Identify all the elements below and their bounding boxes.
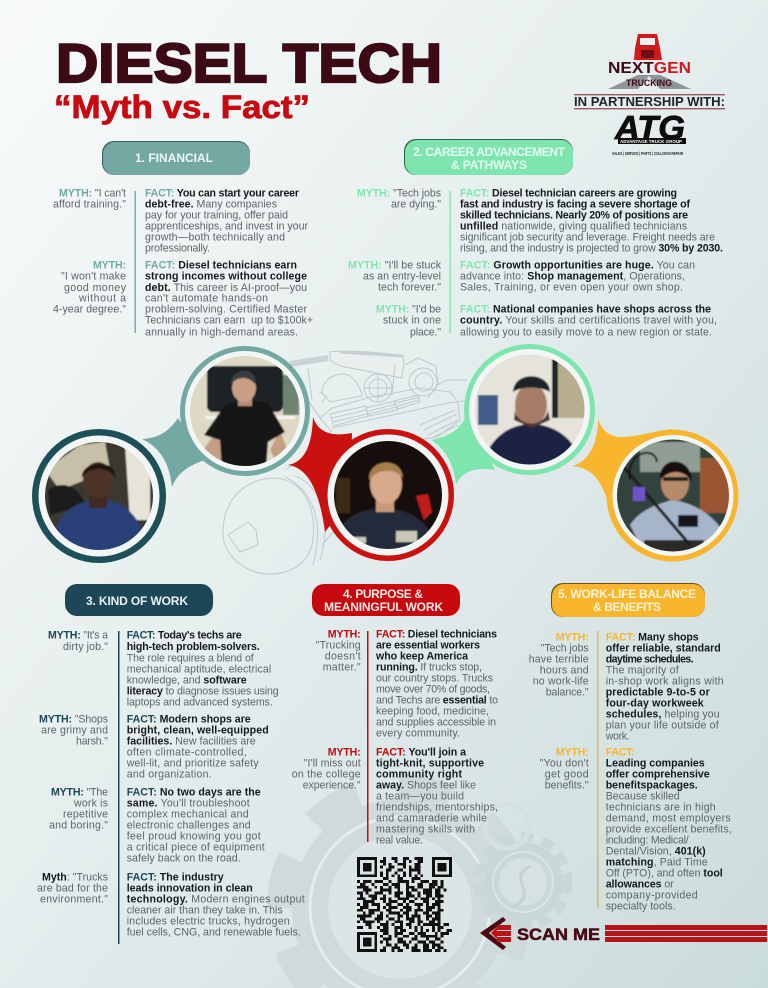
facts: FACT: Growth opportunities are huge. You can [460,260,695,272]
logo: Trucking wordmark: TRUCKING [626,78,672,88]
connector: amber [572,419,672,515]
facts [460,188,723,338]
heading: career advancement: & PATHWAYS [451,158,527,172]
myths: are grimy and [41,724,108,736]
facts: every community. [376,728,460,740]
facts: cleaner air than they take in. This [127,904,283,916]
panel: financial [53,141,313,338]
facts: Off (PTO), and often tool [606,868,723,880]
facts: Dental/Vision, 401(k) [606,846,706,858]
myths: no work-life [533,676,589,688]
facts: offer comprehensive [606,768,710,780]
facts: leads innovation in clean [127,882,253,894]
connector: red [288,417,352,532]
myths: "I won't make [61,270,126,282]
myths: MYTH: [556,746,589,758]
facts: feel proud knowing you got [127,830,261,842]
myths: hours and [540,664,589,676]
facts: can't automate hands-on [145,292,268,304]
facts: tight-knit, supportive [376,758,484,770]
logos: NextGen Trucking and ATG partnership [574,34,725,156]
facts: annually in high-demand areas. [145,326,298,338]
facts: apprenticeships, and invest in your [145,220,308,232]
facts: benefitspackages. [606,780,698,792]
facts: Technicians can earn up to $100k+ [145,314,313,326]
facts: technology. Modern engines output [127,894,305,906]
icon: red truck [634,34,662,60]
facts: daytime schedules. [606,654,694,666]
facts: predictable 9-to-5 or [606,686,710,698]
facts: mechanical aptitude, electrical [127,664,271,676]
myths: MYTH: "Tech jobs [357,188,441,200]
myths [529,632,589,792]
facts: knowledge, and software [127,674,247,686]
panel: career advancement [348,139,723,338]
myths: Myth: "Trucks [42,872,108,884]
myths: without a [78,292,126,304]
facts: keeping food, medicine, [376,706,489,718]
title: DIESEL TECH [56,32,442,94]
facts: complex mechanical and [127,808,249,820]
facts: often climate-controlled, [127,746,247,758]
myths: environment." [40,894,108,906]
photo: bearded technician [464,344,595,475]
facts: FACT: [606,746,635,758]
facts: Leading companies [606,758,705,770]
divider [134,191,136,333]
facts: bright, clean, well-equipped [127,724,269,736]
myths: matter." [323,662,361,674]
myths: MYTH: [328,746,361,758]
engine line sketch [223,351,480,574]
QR code [357,858,452,951]
myths: benefits." [545,780,589,792]
facts [145,188,313,338]
facts: away. Shops feel like [376,780,476,792]
facts: and camaraderie while [376,812,487,824]
facts: four-day workweek [606,698,704,710]
facts: problem-solving. Certified Master [145,304,307,316]
facts: provide excellent benefits, [606,824,732,836]
myths: MYTH: "I'd be [376,304,441,316]
myths: repetitive [63,808,108,820]
facts: in-shop work aligns with [606,676,724,688]
myths: MYTH: "I can't [59,188,126,200]
header: title block [54,32,442,125]
myths [348,188,442,338]
facts: FACT: Today's techs are [127,630,242,642]
facts: safely back on the road. [127,852,241,864]
facts: allowances or [606,878,674,890]
facts: fast and industry is facing a severe shortage of [460,198,690,210]
myths: "Trucking [316,640,361,652]
logo: ATG: SALES | SERVICE | PARTS | COLLISION REPAIR [612,151,683,156]
heading: purpose: MEANINGFUL WORK [324,600,443,614]
logo: NextGen wordmark: NEXTGEN [608,60,691,77]
heading: purpose [312,584,460,616]
facts: FACT: Diesel technicians [376,628,497,640]
heading: kind of work: 3. KIND OF WORK [86,594,188,608]
facts: and organization. [127,768,212,780]
myths: harsh." [76,736,108,748]
facts: including: Medical/ [606,834,689,846]
facts: significant job security and leverage. Freight needs are [460,232,715,244]
myths: are bad for the [37,882,108,894]
facts: real value. [376,834,423,846]
label: SCAN ME [517,926,600,944]
facts: FACT: You'll join a [376,746,466,758]
myths: experience." [303,780,361,792]
facts: a critical piece of equipment [127,842,265,854]
facts: same. You'll troubleshoot [127,798,250,810]
facts: rising, and the industry is projected to grow 30% by 2030. [460,242,723,254]
heading: work-life balance: & BENEFITS [593,600,661,614]
facts: FACT: National companies have shops across the [460,304,711,316]
facts: demand, most employers [606,812,731,824]
facts [605,632,732,912]
myths: as an entry-level [363,270,441,282]
facts: debt. This career is AI-proof—you [145,282,307,294]
facts: Because skilled [606,790,680,802]
myths: MYTH: "I'll be stuck [348,260,442,272]
myths: "I'll miss out [304,758,361,770]
connector: green [431,410,495,485]
facts: company-provided [606,890,698,902]
facts: move over 70% of goods, [376,684,490,696]
facts: growth—both technically and [145,232,285,244]
myths: MYTH: [328,628,361,640]
myths: 4-year degree." [53,304,126,316]
facts: well-lit, and prioritize safety [126,758,259,770]
facts: schedules, helping you [606,708,720,720]
myths: are dying." [391,198,441,210]
partnership label: IN PARTNERSHIP WITH: [574,95,725,109]
background gears [280,787,568,988]
heading: financial: 1. FINANCIAL [135,151,213,165]
facts: high-tech problem-solvers. [127,641,260,653]
divider [367,631,368,842]
heading: kind of work [65,584,213,616]
facts: FACT: You can start your career [145,188,299,200]
heading: work-life balance [551,583,705,617]
myths: MYTH: [556,632,589,644]
facts: advance into: Shop management, Operations, [460,270,685,282]
myths: afford training." [53,198,126,210]
myths: work is [73,798,108,810]
facts: country. Your skills and certifications travel with you, [460,314,717,326]
facts: skilled technicians. Nearly 20% of positions are [460,210,688,222]
panel: kind of work [37,584,305,944]
subtitle: “Myth vs. Fact” [54,89,310,125]
red bars [605,925,767,942]
facts: electronic challenges and [127,820,251,832]
facts: FACT: Modern shops are [127,714,251,726]
heading: purpose: 4. PURPOSE & [343,587,423,601]
facts: fuel cells, CNG, and renewable fuels. [127,926,301,938]
photo: technician with glasses [606,430,738,562]
facts: FACT: Diesel technicians earn [145,260,297,272]
myths [37,630,108,906]
scan me callout [480,917,767,950]
facts: technicians are in high [606,802,716,814]
facts: plan your life outside of [606,720,719,732]
myths: "Tech jobs [541,642,589,654]
facts: work. [605,730,630,742]
heading: work-life balance: 5. WORK-LIFE BALANCE [558,587,696,601]
myths: good money [64,282,127,294]
myths: MYTH: "The [51,786,108,798]
facts: friendships, mentorships, [376,802,498,814]
panel: work-life balance [529,583,732,912]
facts: who keep America [375,650,468,662]
myths: MYTH: "Shops [39,714,108,726]
myths: "You don't [540,758,589,770]
facts: Sales, Training, or even open your own shop. [460,282,683,294]
photo: technician in black shirt [180,346,310,476]
myths: and boring." [49,820,108,832]
photo: technician with ATG badge [322,429,454,561]
panel: purpose [292,584,498,846]
facts: our country stops. Trucks [376,672,493,684]
facts: matching, Paid Time [606,856,708,868]
facts: mastering skills with [376,824,475,836]
myths: MYTH: "It's a [48,630,108,642]
facts: includes electric trucks, hydrogen [127,916,290,928]
facts: community right [376,768,462,780]
icon: left chevron arrow [480,917,506,950]
facts: FACT: Diesel technician careers are growing [460,188,677,200]
facts: The majority of [606,664,679,676]
myths: tech forever." [378,282,441,294]
logo: ATG: ADVANTAGE TRUCK GROUP [620,139,682,144]
facts: running. If trucks stop, [376,662,482,674]
facts: FACT: The industry [127,872,224,884]
facts [126,630,305,938]
facts: pay for your training, offer paid [145,210,288,222]
facts: offer reliable, standard [606,642,721,654]
facts: FACT: Many shops [606,632,699,644]
myths: MYTH: [93,260,126,272]
myths: get good [545,768,589,780]
facts: unfilled nationwide, giving qualified technicians [460,220,687,232]
facts: are essential workers [376,640,480,652]
facts: The role requires a blend of [127,652,254,664]
connector: teal [142,418,205,487]
facts: facilities. New facilities are [127,736,256,748]
facts: FACT: No two days are the [127,786,261,798]
heading: career advancement: 2. CAREER ADVANCEMENT [413,145,566,159]
facts: and Techs are essential to [376,694,498,706]
photo: technician in blue shirt [32,429,166,563]
facts: allowing you to easily move to a new region or state. [460,326,712,338]
icon: road [608,75,691,89]
heading: career advancement [404,139,573,175]
divider [450,191,451,333]
myths: place." [410,326,441,338]
myths: doesn't [325,650,361,662]
myths: have terrible [529,654,589,666]
heading: financial [102,141,250,175]
facts: a team—you build [376,790,464,802]
divider [597,631,598,908]
facts: and supplies accessible in [376,716,496,728]
divider [118,631,120,944]
facts: specialty tools. [606,900,676,912]
myths [292,628,361,792]
myths: dirty job." [63,641,108,653]
myths: balance." [546,686,589,698]
myths: on the college [292,768,361,780]
facts: strong incomes without college [145,270,307,282]
facts: debt-free. Many companies [145,198,277,210]
facts: laptops and advanced systems. [127,696,273,708]
facts: professionally. [145,242,210,254]
myths: stuck in one [383,314,441,326]
logo: ATG: ATG [614,109,685,146]
facts: literacy to diagnose issues using [127,686,279,698]
myths [53,188,127,316]
facts [375,628,498,846]
